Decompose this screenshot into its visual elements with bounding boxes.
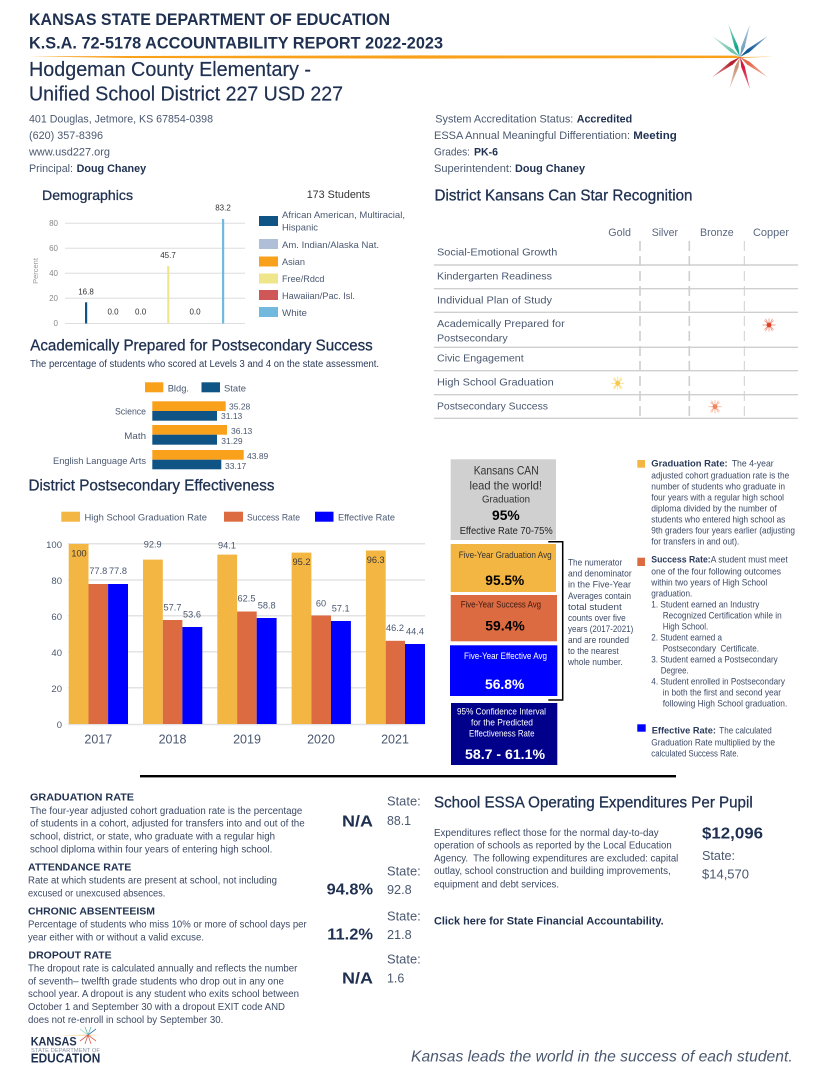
legend: demographics xyxy=(259,210,405,319)
description: expenditures xyxy=(434,828,678,890)
note: five-year averages: Averages contain xyxy=(568,591,631,601)
panel: district postsecondary effectiveness xyxy=(28,478,425,746)
legend: building and state: Bldg. xyxy=(168,383,189,394)
chart: effectiveness bars: 77.8 xyxy=(109,566,127,576)
chart: demographics bars: 0.0 xyxy=(135,308,147,317)
box: five-year success average: 59.4% xyxy=(485,618,525,634)
box: five-year success average xyxy=(451,595,557,641)
note: five-year averages: counts over five xyxy=(568,613,626,623)
header: department title xyxy=(29,11,443,52)
chart: effectiveness bars: 2018 xyxy=(159,732,186,746)
chart: effectiveness bars: 20 xyxy=(51,684,62,695)
chart: demographics bars: 60 xyxy=(49,244,59,253)
icon: bronze star xyxy=(708,400,722,413)
legend: demographics: Hispanic xyxy=(282,223,318,234)
accreditation details: ESSA Annual Meaningful Differentiation: xyxy=(434,130,630,142)
definition: success rate: Postsecondary Certificate. xyxy=(663,643,759,653)
chart: effectiveness bars: 2019 xyxy=(233,732,261,746)
description: chronic absenteeism: Percentage of students who miss 10% or more of school days per xyxy=(28,920,307,931)
footer logo: Kansas State Department of Education xyxy=(31,1027,101,1065)
definition: success rate xyxy=(637,555,788,708)
definition: success rate: A student must meet xyxy=(711,555,788,565)
description: expenditures: outlay, school construction and building improvements, xyxy=(434,866,671,877)
description: dropout rate: school year. A dropout is any student who exits school between xyxy=(28,989,299,1000)
box: five-year effective average xyxy=(450,645,557,696)
heading: effectiveness: District Postsecondary Effectiveness xyxy=(28,478,275,495)
header: department title: KANSAS STATE DEPARTMENT OF EDUCATION xyxy=(29,11,390,29)
chart: demographics bars: 0.0 xyxy=(189,308,201,317)
value: dropout rate: N/A xyxy=(342,970,373,987)
description: attendance rate: excused or unexcused absences. xyxy=(28,889,165,900)
chart: demographics bars: 45.7 xyxy=(160,251,176,260)
heading: ESSA expenditures: School ESSA Operating Expenditures Per Pupil xyxy=(434,794,753,811)
state value: attendance rate xyxy=(387,863,421,897)
definition: graduation rate: diploma divided by the number of xyxy=(651,504,777,514)
definition: graduation rate: 9th graders four years earlier (adjusting xyxy=(651,526,795,536)
description: dropout rate: of seventh– twelfth grade students who drop out in any one xyxy=(28,976,284,987)
definition: graduation rate: adjusted cohort graduation rate is the xyxy=(651,470,789,480)
panel: graduation rate metric xyxy=(30,792,421,856)
footer logo: Kansas State Department of Education: STATE DEPARTMENT OF xyxy=(31,1048,101,1054)
description: attendance rate: Rate at which students are present at school, not including xyxy=(28,876,277,887)
accreditation details: Grades: xyxy=(434,147,470,159)
heading: demographics: Demographics xyxy=(42,187,133,203)
description: graduation rate: of students in a cohort, adjusted for transfers into and out of the xyxy=(30,819,305,830)
chart: effectiveness bars: 100 xyxy=(71,549,87,559)
chart: effectiveness bars: 80 xyxy=(51,576,62,587)
chart: subject bars: Science xyxy=(115,407,146,418)
chart: subject bars: 35.28 xyxy=(229,401,251,411)
legend: effectiveness rates: High School Graduation Rate xyxy=(84,513,207,524)
chart: demographics bars xyxy=(31,204,245,328)
chart: subject bars: 33.17 xyxy=(225,461,247,471)
table rows: measures: Academically Prepared for xyxy=(437,318,565,330)
definition: success rate: following High School graduation. xyxy=(663,698,787,708)
definition: success rate: 1. Student earned an Industry xyxy=(651,599,760,609)
heading: chronic absenteeism: CHRONIC ABSENTEEISM xyxy=(28,906,155,918)
state value: expenditure: State: xyxy=(702,848,735,863)
school contact details xyxy=(28,114,213,175)
panel: ESSA expenditures xyxy=(434,794,763,928)
definition: success rate: Recognized Certification while in xyxy=(663,610,782,620)
state value: graduation rate: 88.1 xyxy=(387,813,411,828)
chart: demographics bars: 0.0 xyxy=(107,308,119,317)
school contact details: www.usd227.org xyxy=(28,147,110,159)
link: state financial accountability: Click here for State Financial Accountability. xyxy=(434,916,664,928)
box: confidence interval: 95% Confidence Interval xyxy=(457,706,546,717)
chart: effectiveness bars xyxy=(46,539,425,746)
heading: graduation rate: GRADUATION RATE xyxy=(30,792,134,804)
school contact details: (620) 357-8396 xyxy=(29,130,103,142)
note: five-year averages: The numerator xyxy=(568,558,622,568)
state value: dropout rate: State: xyxy=(387,951,421,966)
chart: effectiveness bars: 60 xyxy=(51,612,62,623)
definition: graduation rate: students who entered high school as xyxy=(651,515,786,525)
note: five-year averages: whole number. xyxy=(567,657,623,667)
description: chronic absenteeism xyxy=(28,920,307,944)
chart: effectiveness bars: 57.7 xyxy=(164,602,181,612)
panel: attendance rate metric xyxy=(28,861,421,900)
box: Kansans CAN goal: Graduation xyxy=(482,494,530,506)
state value: dropout rate: 1.6 xyxy=(387,971,404,986)
panel: rate definitions xyxy=(637,459,795,758)
bars: 2019 xyxy=(217,555,277,724)
description: graduation rate xyxy=(30,806,305,856)
chart: effectiveness bars: 40 xyxy=(51,648,62,659)
box: confidence interval: for the Predicted xyxy=(471,718,533,729)
definition: success rate: High School. xyxy=(663,621,708,631)
chart: demographics bars: 83.2 xyxy=(215,204,231,213)
table rows: measures: Civic Engagement xyxy=(437,353,524,365)
legend: effectiveness rates: Effective Rate xyxy=(338,513,395,524)
bracket xyxy=(548,542,563,700)
table rows: measures: Social-Emotional Growth xyxy=(437,247,557,259)
definition: graduation rate: four years with a regular high school xyxy=(651,492,784,502)
box: Kansans CAN goal: Effective Rate 70-75% xyxy=(460,525,553,537)
chart: effectiveness bars: 44.4 xyxy=(406,626,424,636)
chart: effectiveness bars: 96.3 xyxy=(367,555,385,565)
icon: gold star xyxy=(611,377,624,390)
chart: subject bars: 31.29 xyxy=(221,436,243,446)
value: attendance rate: 94.8% xyxy=(327,882,373,899)
description: dropout rate: The dropout rate is calculated annually and reflects the number xyxy=(28,964,298,975)
accreditation details xyxy=(434,114,677,175)
panel: star recognition xyxy=(434,188,798,418)
chart: subject bars: 31.13 xyxy=(221,411,243,421)
chart: subject bars xyxy=(53,401,269,471)
definition: success rate: one of the four following outcomes xyxy=(651,566,781,576)
definition: graduation rate: The 4-year xyxy=(732,459,774,469)
accreditation details: System Accreditation Status: xyxy=(435,114,573,126)
legend: demographics: Asian xyxy=(282,257,305,268)
heading: attendance rate: ATTENDANCE RATE xyxy=(28,861,131,873)
definition: success rate: 4. Student enrolled in Postsecondary xyxy=(651,676,785,686)
chart: effectiveness bars: 100 xyxy=(46,540,62,551)
table rows: measures: Postsecondary Success xyxy=(437,400,548,412)
box: five-year graduation average: Five-Year Graduation Avg xyxy=(459,550,552,561)
state value: attendance rate: State: xyxy=(387,863,421,878)
definition: success rate: 2. Student earned a xyxy=(651,632,723,642)
definition: success rate: Success Rate: xyxy=(651,555,711,566)
state value: chronic absenteeism xyxy=(387,908,421,942)
accreditation details: Accredited xyxy=(577,114,632,126)
chart: effectiveness bars: 46.2 xyxy=(386,623,404,633)
school contact details: Principal: xyxy=(29,163,73,175)
box: five-year graduation average xyxy=(451,544,556,592)
box: confidence interval: Effectiveness Rate xyxy=(469,729,534,740)
chart: demographics bars: 40 xyxy=(49,269,59,278)
box: Kansans CAN goal: lead the world! xyxy=(470,478,542,492)
legend: effectiveness rates xyxy=(61,512,395,524)
box: Kansans CAN goal: Kansans CAN xyxy=(474,464,539,478)
panel: dropout rate metric xyxy=(28,949,421,1026)
bars: 2018 xyxy=(143,560,202,724)
panel: chronic absenteeism metric xyxy=(28,906,421,944)
legend: demographics: White xyxy=(282,308,307,319)
table header: medal levels xyxy=(608,227,789,239)
panel: goal and average boxes xyxy=(450,459,633,765)
note: five-year averages: and denominator xyxy=(568,569,632,579)
note: five-year averages: and are rounded xyxy=(568,635,629,645)
chart: demographics bars: 0 xyxy=(54,319,59,328)
description: expenditures: operation of schools as reported by the Local Education xyxy=(434,841,672,852)
chart: effectiveness bars: 2017 xyxy=(84,732,112,746)
legend: building and state: State xyxy=(224,383,246,394)
legend: effectiveness rates: Success Rate xyxy=(247,513,300,524)
definition: success rate: in both the first and second year xyxy=(663,687,781,697)
definition: graduation rate: Graduation Rate: xyxy=(651,459,728,470)
chart: subject bars: 36.13 xyxy=(231,426,253,436)
definition: success rate: within two years of High School xyxy=(650,577,767,587)
footer logo: Kansas State Department of Education: EDUCATION xyxy=(31,1051,100,1065)
description: graduation rate: school diploma within four years of entering high school. xyxy=(30,845,272,856)
state value: chronic absenteeism: 21.8 xyxy=(387,927,412,942)
description: expenditures: equipment and debt services. xyxy=(434,879,559,890)
accreditation details: Meeting xyxy=(633,130,677,142)
accreditation details: PK-6 xyxy=(474,147,498,159)
chart: subject bars: Math xyxy=(124,431,146,442)
table rows: measures: High School Graduation xyxy=(437,377,554,389)
table rows: measures: Individual Plan of Study xyxy=(437,294,553,306)
chart: effectiveness bars: 2020 xyxy=(307,732,335,746)
chart: demographics bars: 16.8 xyxy=(78,288,94,297)
school contact details: Doug Chaney xyxy=(77,163,147,175)
bars: 2017 xyxy=(69,544,128,724)
box: five-year success average: Five-Year Success Avg xyxy=(461,599,541,610)
box: Kansans CAN goal: 95% xyxy=(492,507,520,523)
note: five-year averages xyxy=(567,558,633,667)
icon: header starburst with orange rule xyxy=(29,24,773,89)
table rows: measures: Kindergarten Readiness xyxy=(437,270,552,282)
box: five-year effective average: Five-Year Effective Avg xyxy=(464,651,547,662)
panel: academically prepared xyxy=(30,338,379,471)
description: attendance rate xyxy=(28,876,277,900)
panel: demographics xyxy=(31,187,405,328)
note: five-year averages: total student xyxy=(568,602,622,612)
definition: effective rate: The calculated xyxy=(719,726,772,736)
chart: effectiveness bars: 95.2 xyxy=(293,557,310,567)
description: expenditures: Agency. The following expenditures are excluded: capital xyxy=(434,854,678,865)
description: graduation rate: The four-year adjusted cohort graduation rate is the percentage xyxy=(30,806,303,817)
heading: dropout rate: DROPOUT RATE xyxy=(28,949,112,961)
chart: effectiveness bars: 92.9 xyxy=(144,539,162,549)
tagline: Kansas leads the world in the success of each student. xyxy=(411,1049,793,1066)
description: dropout rate xyxy=(28,964,299,1026)
accreditation details: Superintendent: xyxy=(434,163,512,175)
definition: effective rate xyxy=(637,724,775,758)
chart: effectiveness bars: 77.8 xyxy=(89,566,107,576)
box: Kansans CAN goal xyxy=(451,459,556,540)
chart: subject bars: 43.89 xyxy=(247,451,269,461)
legend: demographics: African American, Multiracial, xyxy=(282,210,405,221)
box: confidence interval: 58.7 - 61.1% xyxy=(465,747,545,762)
description: dropout rate: does not re-enroll in school by September 30. xyxy=(28,1015,223,1026)
accreditation details: Doug Chaney xyxy=(515,163,586,175)
school name xyxy=(29,59,343,106)
description: state assessment: The percentage of students who scored at Levels 3 and 4 on the state assessment. xyxy=(30,359,379,370)
value: graduation rate: N/A xyxy=(342,814,373,831)
chart: effectiveness bars: 60 xyxy=(316,599,326,609)
legend: demographics: Free/Rdcd xyxy=(282,274,324,285)
chart: demographics bars: Percent xyxy=(31,257,40,284)
school name: Unified School District 227 USD 227 xyxy=(29,84,343,106)
definition: success rate: Degree. xyxy=(661,665,689,675)
definition: graduation rate xyxy=(637,459,795,547)
value: school expenditure: $12,096 xyxy=(702,825,763,842)
description: graduation rate: school, district, or state, who graduate with a regular high xyxy=(30,832,275,842)
school contact details: 401 Douglas, Jetmore, KS 67854-0398 xyxy=(29,114,213,126)
description: dropout rate: October 1 and September 30 with a dropout EXIT code AND xyxy=(28,1002,285,1013)
bars: 2020 xyxy=(292,553,351,724)
student count: 173 Students xyxy=(307,189,371,201)
footer logo: Kansas State Department of Education: KANSAS xyxy=(31,1036,77,1048)
value: chronic absenteeism: 11.2% xyxy=(327,927,373,944)
school name: Hodgeman County Elementary - xyxy=(29,59,311,81)
state value: expenditure xyxy=(702,848,749,882)
legend: demographics: Am. Indian/Alaska Nat. xyxy=(282,240,379,251)
box: five-year effective average: 56.8% xyxy=(485,676,525,692)
chart: effectiveness bars: 53.6 xyxy=(183,610,201,620)
chart: subject bars: English Language Arts xyxy=(53,456,146,467)
state value: chronic absenteeism: State: xyxy=(387,908,421,923)
legend: demographics: Hawaiian/Pac. Isl. xyxy=(282,291,355,302)
note: five-year averages: in the Five-Year xyxy=(568,580,631,590)
state value: graduation rate xyxy=(387,794,421,828)
definition: graduation rate: for transfers in and out). xyxy=(651,537,739,547)
state value: attendance rate: 92.8 xyxy=(387,882,412,897)
table header: medal levels: Gold xyxy=(608,227,631,239)
icon: copper star xyxy=(762,318,776,332)
heading: academically prepared: Academically Prepared for Postsecondary Success xyxy=(30,338,373,355)
header: department title: K.S.A. 72-5178 ACCOUNTABILITY REPORT 2022-2023 xyxy=(29,34,443,52)
definition: success rate: graduation. xyxy=(651,588,692,598)
bars: 2021 xyxy=(366,550,425,724)
table header: medal levels: Copper xyxy=(753,227,789,239)
note: five-year averages: years (2017-2021) xyxy=(568,624,633,634)
definition: effective rate: Effective Rate: xyxy=(652,726,716,737)
definition: graduation rate: number of students who graduate in xyxy=(651,481,785,491)
chart: effectiveness bars: 62.5 xyxy=(238,594,255,604)
box: confidence interval xyxy=(451,703,557,765)
description: chronic absenteeism: year either with or without a valid excuse. xyxy=(28,933,204,944)
chart: demographics bars: 20 xyxy=(49,294,59,303)
chart: demographics bars: 80 xyxy=(49,219,59,228)
table rows: measures xyxy=(437,247,565,412)
definition: effective rate: Graduation Rate multiplied by the xyxy=(651,737,775,747)
description: expenditures: Expenditures reflect those for the normal day-to-day xyxy=(434,828,659,839)
table header: medal levels: Silver xyxy=(652,227,678,239)
chart: effectiveness bars: 57.1 xyxy=(332,604,350,614)
definition: effective rate: calculated Success Rate. xyxy=(651,748,739,758)
chart: effectiveness bars: 94.1 xyxy=(218,541,236,551)
definition: success rate: 3. Student earned a Postsecondary xyxy=(651,654,778,664)
state value: graduation rate: State: xyxy=(387,794,421,809)
chart: effectiveness bars: 58.8 xyxy=(258,601,276,611)
state value: expenditure: $14,570 xyxy=(702,867,749,882)
legend: building and state xyxy=(145,382,246,394)
chart: effectiveness bars: 0 xyxy=(57,720,62,731)
table rows: measures: Postsecondary xyxy=(437,333,508,345)
table header: medal levels: Bronze xyxy=(700,227,734,239)
chart: effectiveness bars: 2021 xyxy=(381,732,409,746)
note: five-year averages: to the nearest xyxy=(568,646,619,656)
state value: dropout rate xyxy=(387,951,421,986)
box: five-year graduation average: 95.5% xyxy=(485,572,525,588)
heading: star recognition: District Kansans Can Star Recognition xyxy=(434,188,692,205)
